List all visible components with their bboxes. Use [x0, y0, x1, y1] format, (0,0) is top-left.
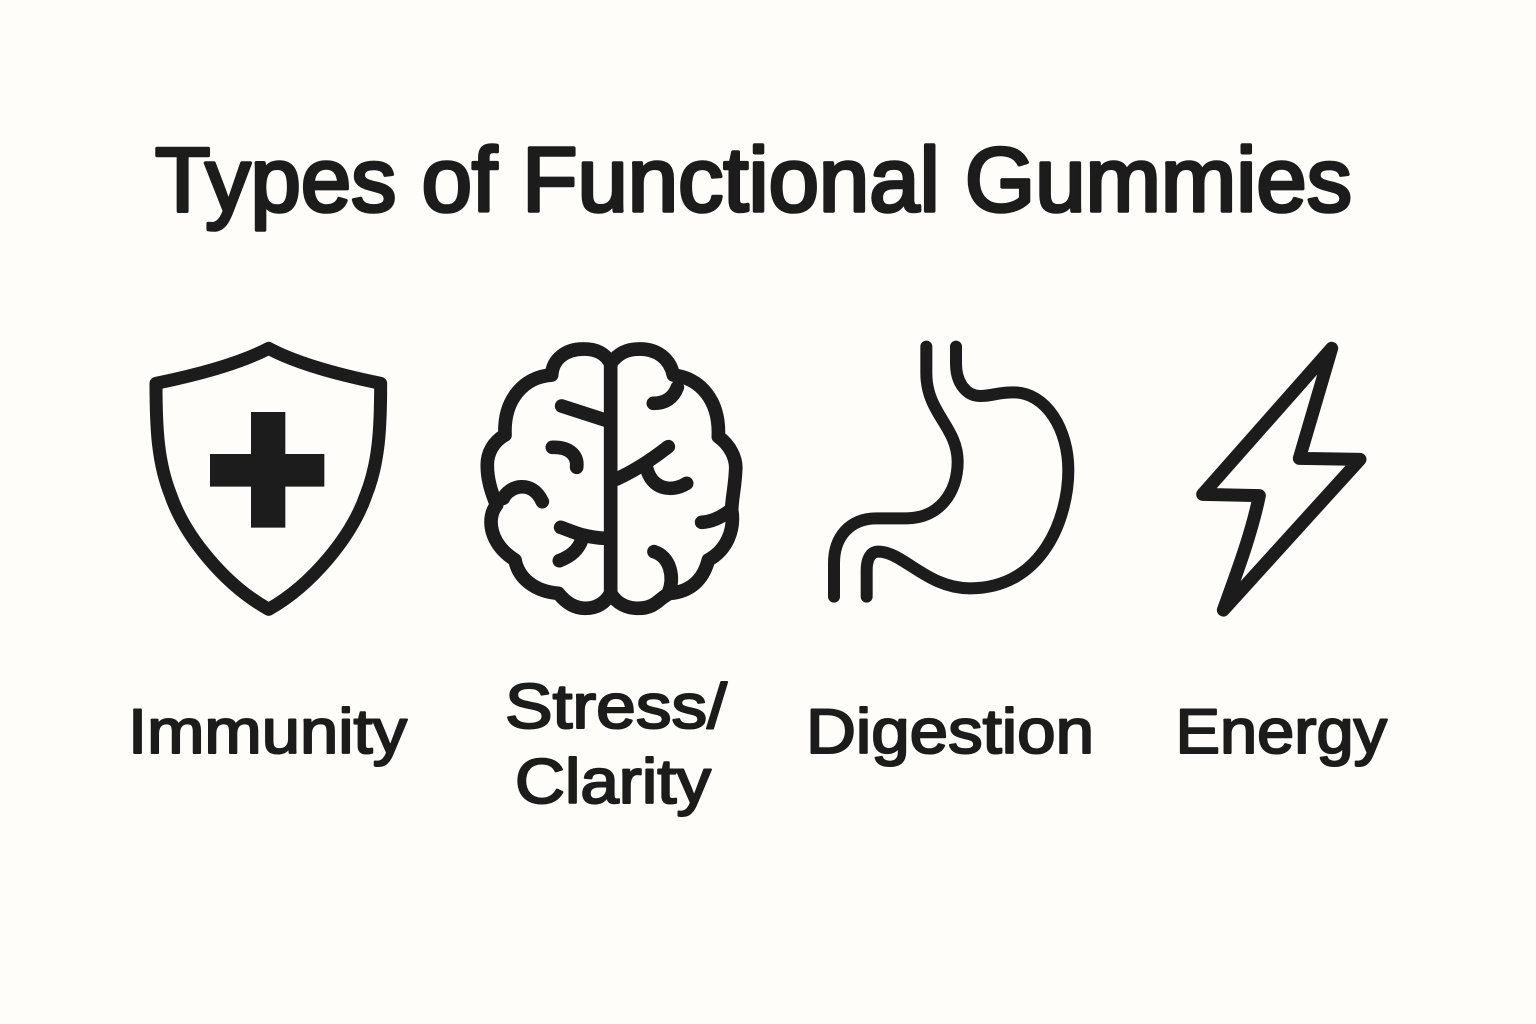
- label: Digestion: Digestion: [806, 697, 1094, 767]
- icon: shield with cross: [156, 348, 381, 609]
- label: Stress/Clarity: Stress/: [505, 672, 728, 742]
- icon: lightning bolt: [1203, 348, 1360, 610]
- title: Types of Functional Gummies: [155, 130, 1352, 231]
- label: Immunity: Immunity: [128, 697, 408, 767]
- icon: brain: [487, 349, 736, 608]
- label: Stress/Clarity: Clarity: [515, 747, 712, 817]
- icon: stomach: [834, 347, 1068, 597]
- label: Stress/Clarity: [505, 672, 728, 817]
- label: Energy: Energy: [1176, 697, 1388, 767]
